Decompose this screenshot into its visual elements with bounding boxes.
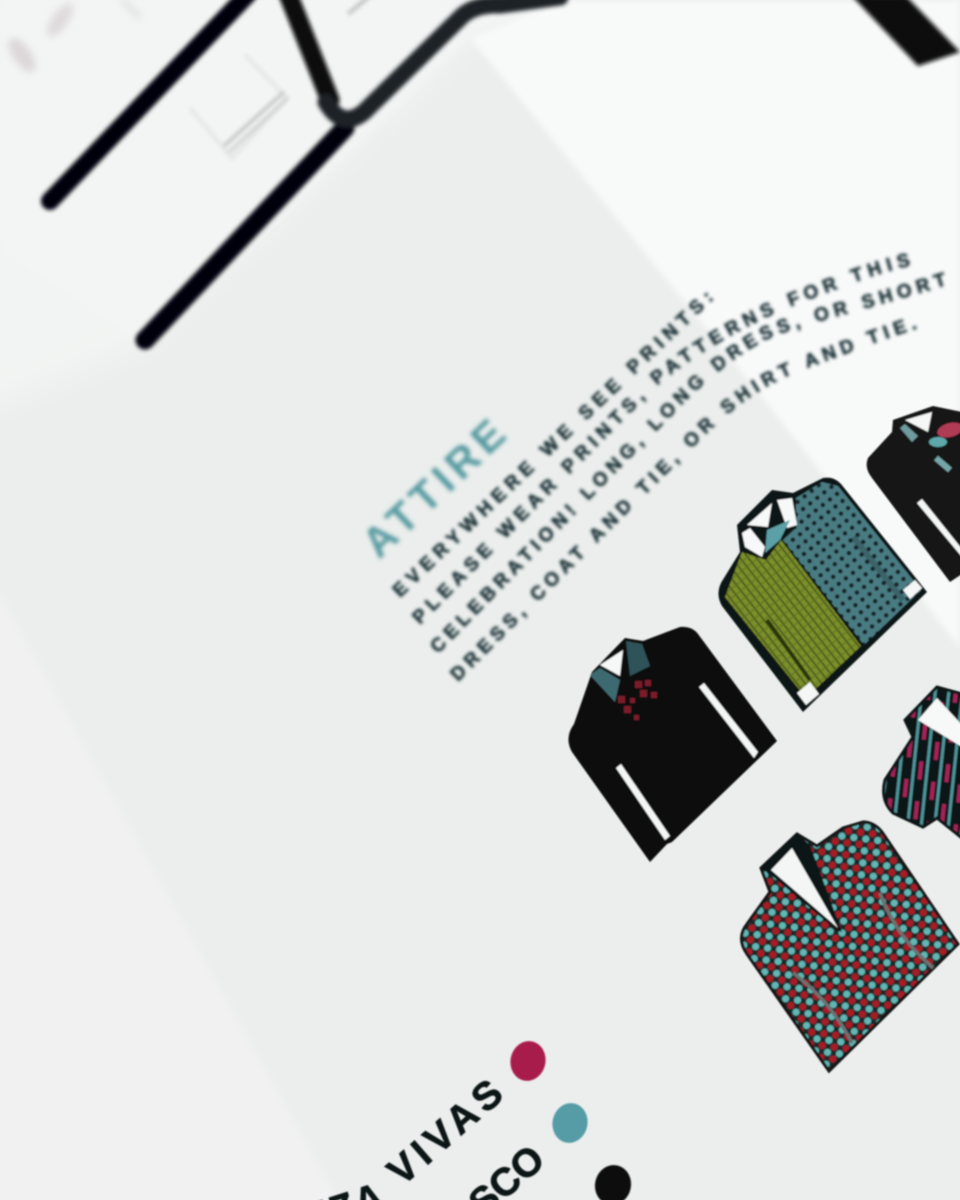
attire description text: CELEBRATION! LONG, LONG DRESS, OR SHORT: [428, 270, 946, 654]
dot: black: [591, 1162, 635, 1200]
dot: teal: [549, 1100, 591, 1146]
heading: attire: ATTIRE: [353, 410, 514, 567]
dot: magenta: [507, 1038, 549, 1084]
shirt icon: green sweater with blue shirt: [718, 478, 927, 712]
shirt icon: striped shirt at the right edge: [884, 687, 960, 838]
out-of-focus black diagram lines: [50, 0, 560, 340]
names list: [318, 1080, 542, 1200]
attire description text: EVERYWHERE WE SEE PRINTS:: [390, 290, 716, 600]
names list: VIVAS: [380, 1071, 511, 1194]
attire description text: DRESS, COAT AND TIE, OR SHIRT AND TIE.: [448, 317, 919, 684]
shirt icon: black shirt with coat: [568, 627, 777, 862]
shirt icon: black shirt at the right edge: [867, 406, 960, 582]
top-right black band: [852, 0, 960, 66]
jacket icon: red and teal dotted blazer: [742, 822, 958, 1071]
faint out-of-focus marks at top left: [3, 0, 140, 77]
faint pale square and rules: [190, 0, 372, 158]
attire description text: PLEASE WEAR PRINTS, PATTERNS FOR THIS: [410, 251, 912, 626]
